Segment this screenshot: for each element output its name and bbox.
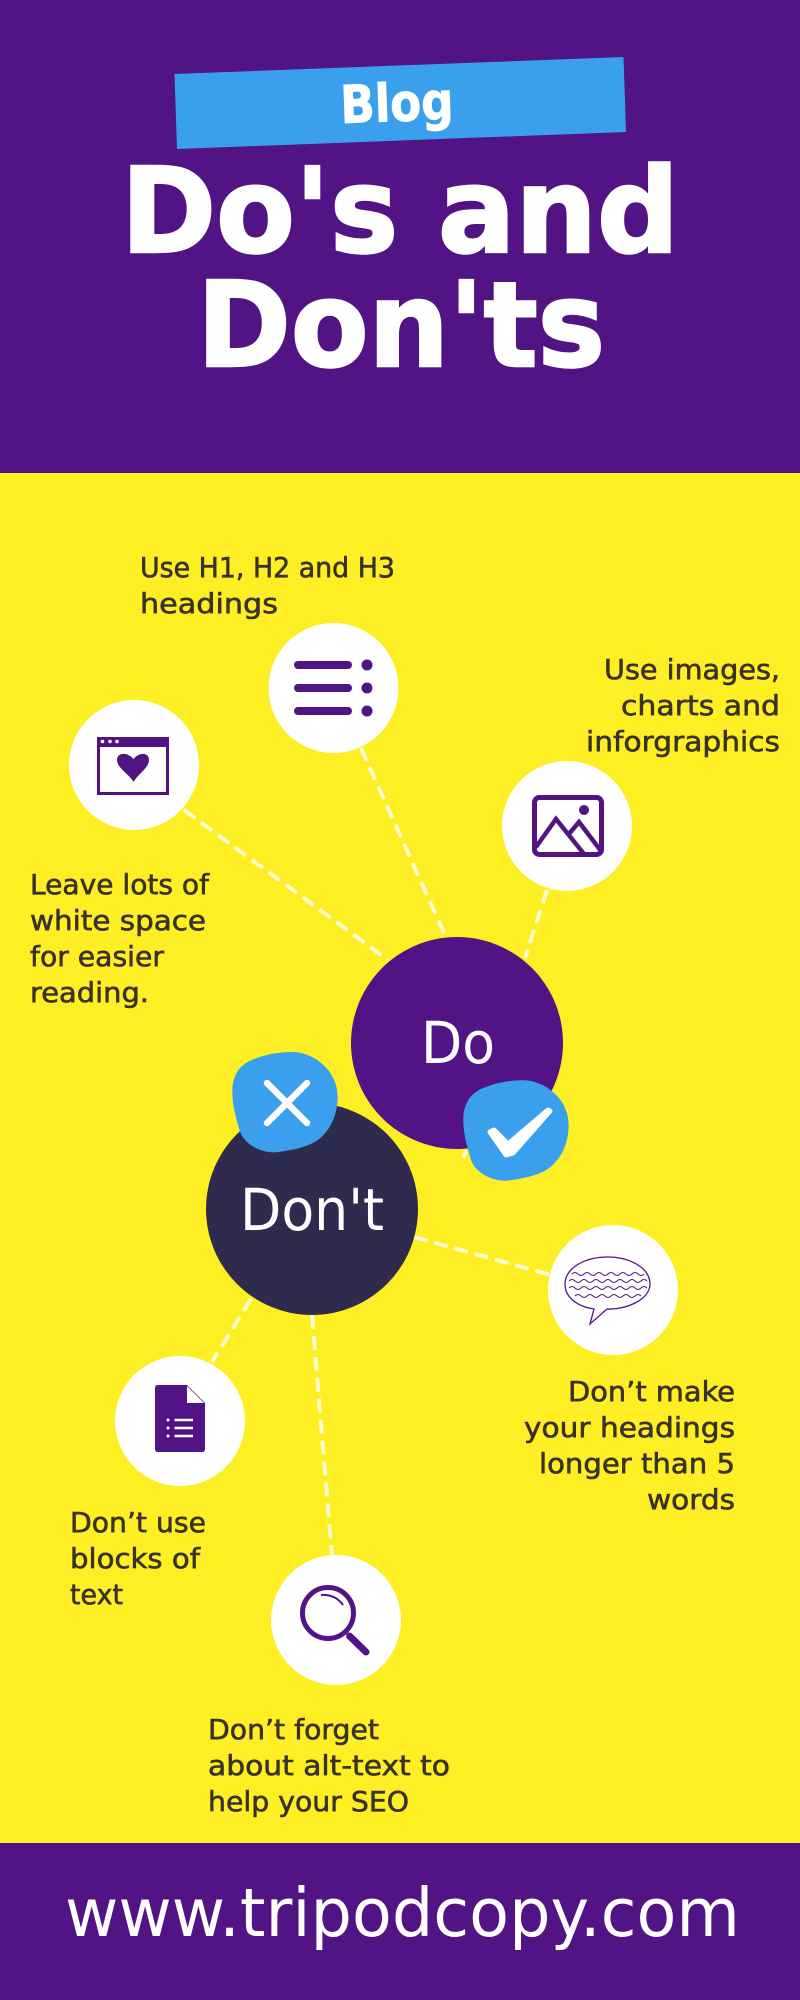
text: use headings: headings <box>140 588 278 620</box>
blog banner <box>174 57 626 149</box>
text: leave white space: reading. <box>30 977 149 1009</box>
header panel <box>0 0 800 473</box>
text: leave white space <box>30 869 210 1009</box>
text: headings length <box>524 1376 735 1516</box>
text: headings length: your headings <box>524 1412 735 1444</box>
text: leave white space: for easier <box>30 941 165 973</box>
circle: don't <box>206 1103 418 1315</box>
text: blocks of text: text <box>70 1579 123 1611</box>
text: alt-text: help your SEO <box>208 1786 409 1818</box>
text: headings length: Don’t make <box>568 1376 735 1408</box>
text: leave white space: Leave lots of <box>30 869 210 901</box>
yellow main background <box>0 473 800 1843</box>
text: blocks of text: blocks of <box>70 1543 201 1575</box>
icon: browser window with heart <box>69 700 199 830</box>
text: use images: charts and <box>621 690 780 722</box>
dashed connectors <box>184 748 551 1556</box>
title <box>121 142 679 394</box>
footer panel: www.tripodcopy.com <box>65 1874 740 1952</box>
icon: speech bubble <box>548 1225 678 1355</box>
blob: cross <box>232 1052 338 1152</box>
text: blocks of text <box>70 1507 206 1611</box>
text: alt-text <box>208 1714 450 1818</box>
icon: list <box>268 623 398 753</box>
blog banner: Blog <box>339 72 454 136</box>
circle: do <box>351 937 563 1149</box>
title: Do's and <box>121 142 679 280</box>
text: use images <box>586 654 780 758</box>
blob: check <box>463 1080 569 1181</box>
text: use headings: Use H1, H2 and H3 <box>140 552 395 584</box>
text: blocks of text: Don’t use <box>70 1507 206 1539</box>
title: Don'ts <box>197 256 605 394</box>
text: use images: Use images, <box>604 654 780 686</box>
circle: do: Do <box>421 1009 495 1077</box>
footer panel <box>0 1843 800 2000</box>
icon: magnifier <box>271 1555 401 1685</box>
text: headings length: longer than 5 <box>539 1448 735 1480</box>
text: alt-text: about alt-text to <box>208 1750 450 1782</box>
circle: don't: Don't <box>240 1176 384 1244</box>
icon: document <box>115 1356 245 1486</box>
icon: picture <box>502 761 632 891</box>
text: headings length: words <box>647 1484 735 1516</box>
text: alt-text: Don’t forget <box>208 1714 379 1746</box>
text: use headings <box>140 552 395 620</box>
text: use images: inforgraphics <box>586 726 780 758</box>
text: leave white space: white space <box>30 905 206 937</box>
